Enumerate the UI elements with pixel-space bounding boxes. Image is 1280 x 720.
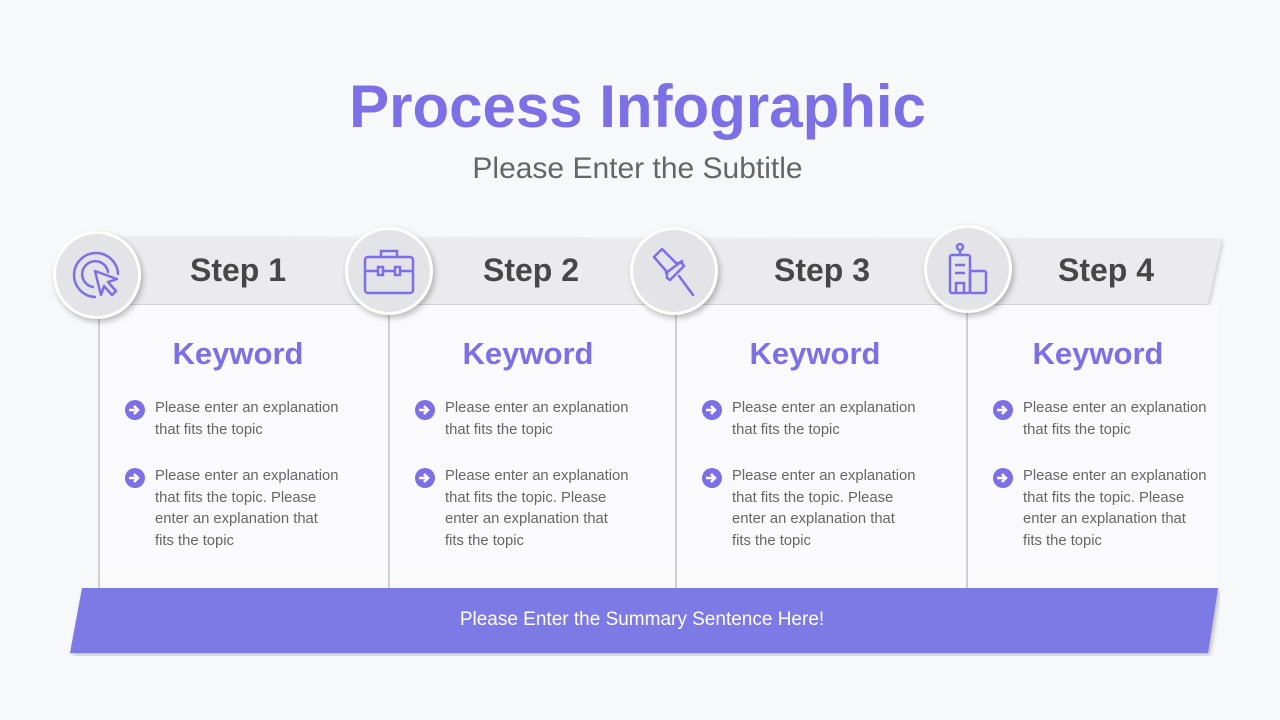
bullets 4 (993, 400, 1206, 548)
panel: step 2: that fits the topic. Please (445, 490, 606, 506)
panel: step 4: that fits the topic. Please (1023, 490, 1184, 506)
panel: step 1: enter an explanation that (155, 511, 318, 527)
bullets 1 (125, 400, 338, 548)
panel: step 2: fits the topic (445, 532, 524, 548)
panel: step 3: Please enter an explanation (732, 468, 915, 484)
keyword 3: Keyword (750, 336, 880, 371)
panel: step 1: Please enter an explanation (155, 400, 338, 416)
icon: push pin (630, 227, 718, 315)
panel: step 4: enter an explanation that (1023, 511, 1186, 527)
panel: step 1: that fits the topic. Please (155, 490, 316, 506)
icon: briefcase (345, 227, 433, 315)
title: Process Infographic (349, 73, 926, 140)
panel: step 3: Please enter an explanation (732, 400, 915, 416)
panel: step 1: that fits the topic (155, 422, 263, 438)
panel: step 2: that fits the topic (445, 422, 553, 438)
panel: step 2: Please enter an explanation (445, 400, 628, 416)
panel: step 2: enter an explanation that (445, 511, 608, 527)
panel: step 4: fits the topic (1023, 532, 1102, 548)
panel: step 3: that fits the topic (732, 422, 840, 438)
step 3 label: Step 3 (774, 252, 870, 288)
panel: step 4: Please enter an explanation (1023, 468, 1206, 484)
panel: step 1 (98, 318, 338, 588)
panel: step 1: Please enter an explanation (155, 468, 338, 484)
icon: click cursor (53, 231, 141, 319)
panel: step 4: that fits the topic (1023, 422, 1131, 438)
panel: step 4 (966, 313, 1206, 588)
panel: step 2: Please enter an explanation (445, 468, 628, 484)
keyword 1: Keyword (173, 336, 303, 371)
bullets 2 (415, 400, 628, 548)
bullets 3 (702, 400, 915, 548)
summary text: Please Enter the Summary Sentence Here! (460, 609, 824, 630)
icon: building (924, 225, 1012, 313)
step 2 label: Step 2 (483, 252, 579, 288)
panel: step 1: fits the topic (155, 532, 234, 548)
step 4 label: Step 4 (1058, 252, 1154, 288)
panel: step 2 (388, 315, 628, 588)
panel: step 3 (675, 314, 915, 588)
subtitle: Please Enter the Subtitle (472, 152, 803, 185)
panel: step 3: fits the topic (732, 532, 811, 548)
keyword 4: Keyword (1033, 336, 1163, 371)
panel: step 3: that fits the topic. Please (732, 490, 893, 506)
summary bar (70, 588, 1220, 656)
panel: step 4: Please enter an explanation (1023, 400, 1206, 416)
keyword 2: Keyword (463, 336, 593, 371)
step labels: Step 1 (190, 252, 286, 288)
panel: step 3: enter an explanation that (732, 511, 895, 527)
